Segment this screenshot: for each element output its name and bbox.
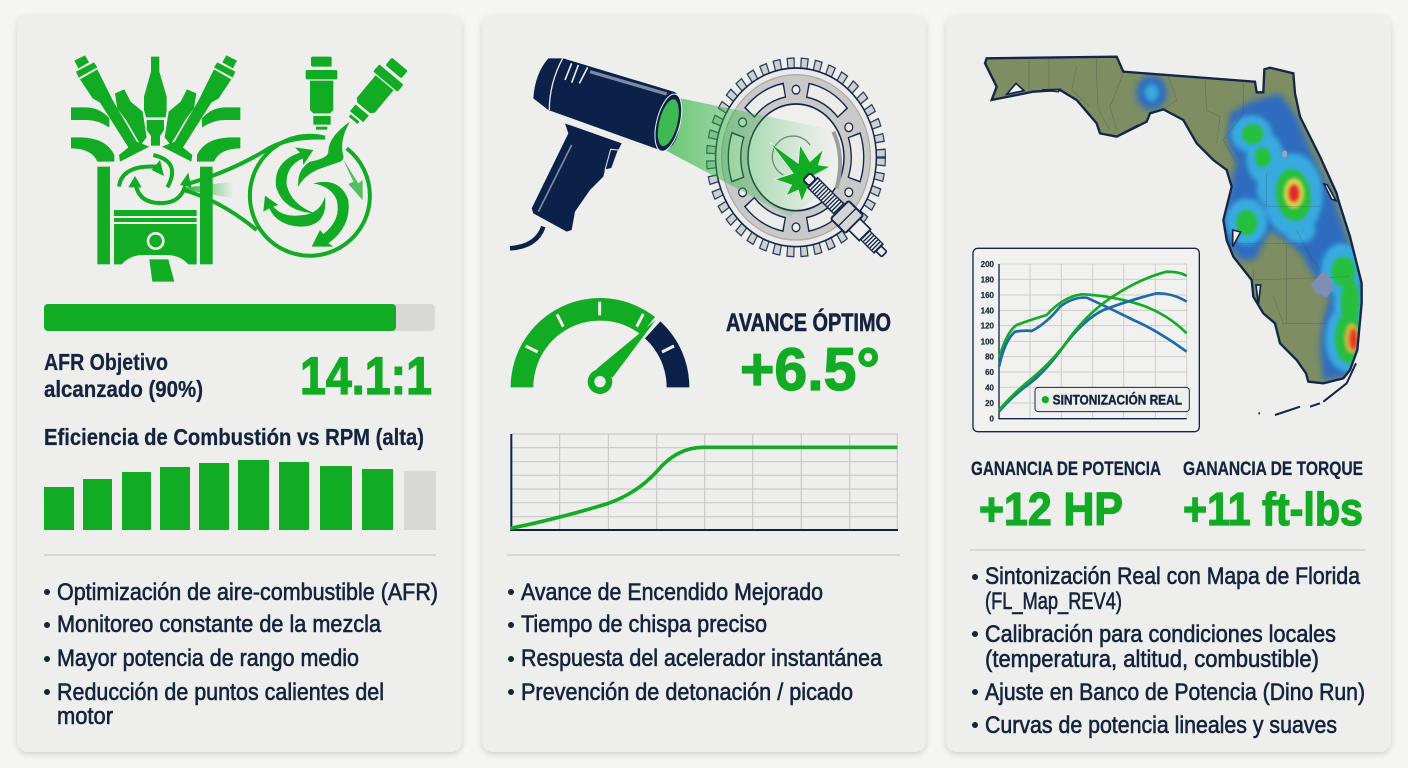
- AFR label: alcanzado (90%): [44, 376, 203, 402]
- panel: combustion: [17, 15, 462, 752]
- chart legend: [1035, 387, 1189, 412]
- chart heading: Eficiencia de Combustión vs RPM (alta): [44, 424, 424, 450]
- bullet list: Avance de Encendido Mejorado: [521, 579, 823, 606]
- bullet list: Mayor potencia de rango medio: [57, 645, 359, 672]
- panel: ignition: [482, 15, 926, 752]
- inset chart: dyno curves: 160: [981, 291, 995, 300]
- inset chart: dyno curves: [973, 248, 1199, 432]
- bullet list: (temperatura, altitud, combustible): [985, 646, 1319, 673]
- panel: tuning: [946, 15, 1391, 752]
- inset chart: dyno curves: 60: [985, 368, 995, 377]
- gauge: [511, 298, 689, 394]
- bullet list: Prevención de detonación / picado: [521, 679, 853, 706]
- bullet list: Monitoreo constante de la mezcla: [57, 611, 382, 638]
- line chart: timing curve: [511, 434, 898, 530]
- spark plug: [797, 167, 893, 263]
- inset chart: dyno curves: 40: [985, 383, 995, 392]
- icon: sprocket and heat gun: [510, 58, 893, 263]
- progress bar: [44, 304, 435, 331]
- stat: power gain: +12 HP: [979, 483, 1123, 535]
- bullet list: (FL_Map_REV4): [985, 588, 1122, 615]
- bullet list: Respuesta del acelerador instantánea: [521, 645, 883, 672]
- map: Florida heat map: [985, 57, 1368, 415]
- spark: [770, 143, 830, 202]
- inset chart: dyno curves: 80: [985, 353, 995, 362]
- inset chart: dyno curves: 0: [990, 414, 995, 423]
- inset chart: dyno curves: 120: [981, 322, 995, 331]
- chart legend: SINTONIZACIÓN REAL: [1053, 391, 1182, 408]
- inset chart: dyno curves: 140: [981, 306, 995, 315]
- AFR label: [44, 349, 203, 402]
- heading: optimal advance: AVANCE ÓPTIMO: [726, 307, 891, 337]
- bullet list: Ajuste en Banco de Potencia (Dino Run): [985, 679, 1365, 706]
- heat gun: [510, 58, 687, 248]
- bullet list: Optimización de aire-combustible (AFR): [57, 579, 438, 606]
- bullet list: [44, 579, 438, 730]
- bullet list: motor: [57, 703, 113, 730]
- bullet list: Tiempo de chispa preciso: [521, 611, 767, 638]
- inset chart: dyno curves: 200: [981, 260, 995, 269]
- bullet list: Curvas de potencia lineales y suaves: [985, 712, 1337, 739]
- stat: torque gain: +11 ft-lbs: [1183, 483, 1363, 535]
- stat: power gain: GANANCIA DE POTENCIA: [971, 459, 1161, 480]
- inset chart: dyno curves: 180: [981, 275, 995, 284]
- inset chart: dyno curves: 20: [985, 399, 995, 408]
- AFR label: AFR Objetivo: [44, 349, 168, 375]
- stat: torque gain: [1183, 459, 1363, 535]
- icon: swirl arrows: [263, 122, 363, 247]
- bullet list: [972, 563, 1365, 739]
- value: optimal advance: +6.5°: [740, 336, 880, 403]
- bullet list: Calibración para condiciones locales: [985, 621, 1336, 648]
- inset chart: dyno curves: 100: [981, 337, 995, 346]
- stat: power gain: [971, 459, 1161, 535]
- bullet list: [508, 579, 883, 706]
- bullet list: Reducción de puntos calientes del: [57, 679, 384, 706]
- bar chart: [44, 460, 436, 530]
- green beam: [665, 98, 833, 217]
- AFR value: 14.1:1: [300, 347, 432, 406]
- sprocket: [711, 63, 881, 251]
- icon: engine cylinder and injectors: [71, 54, 412, 282]
- bullet list: Sintonización Real con Mapa de Florida: [985, 563, 1361, 590]
- stat: torque gain: GANANCIA DE TORQUE: [1183, 459, 1363, 480]
